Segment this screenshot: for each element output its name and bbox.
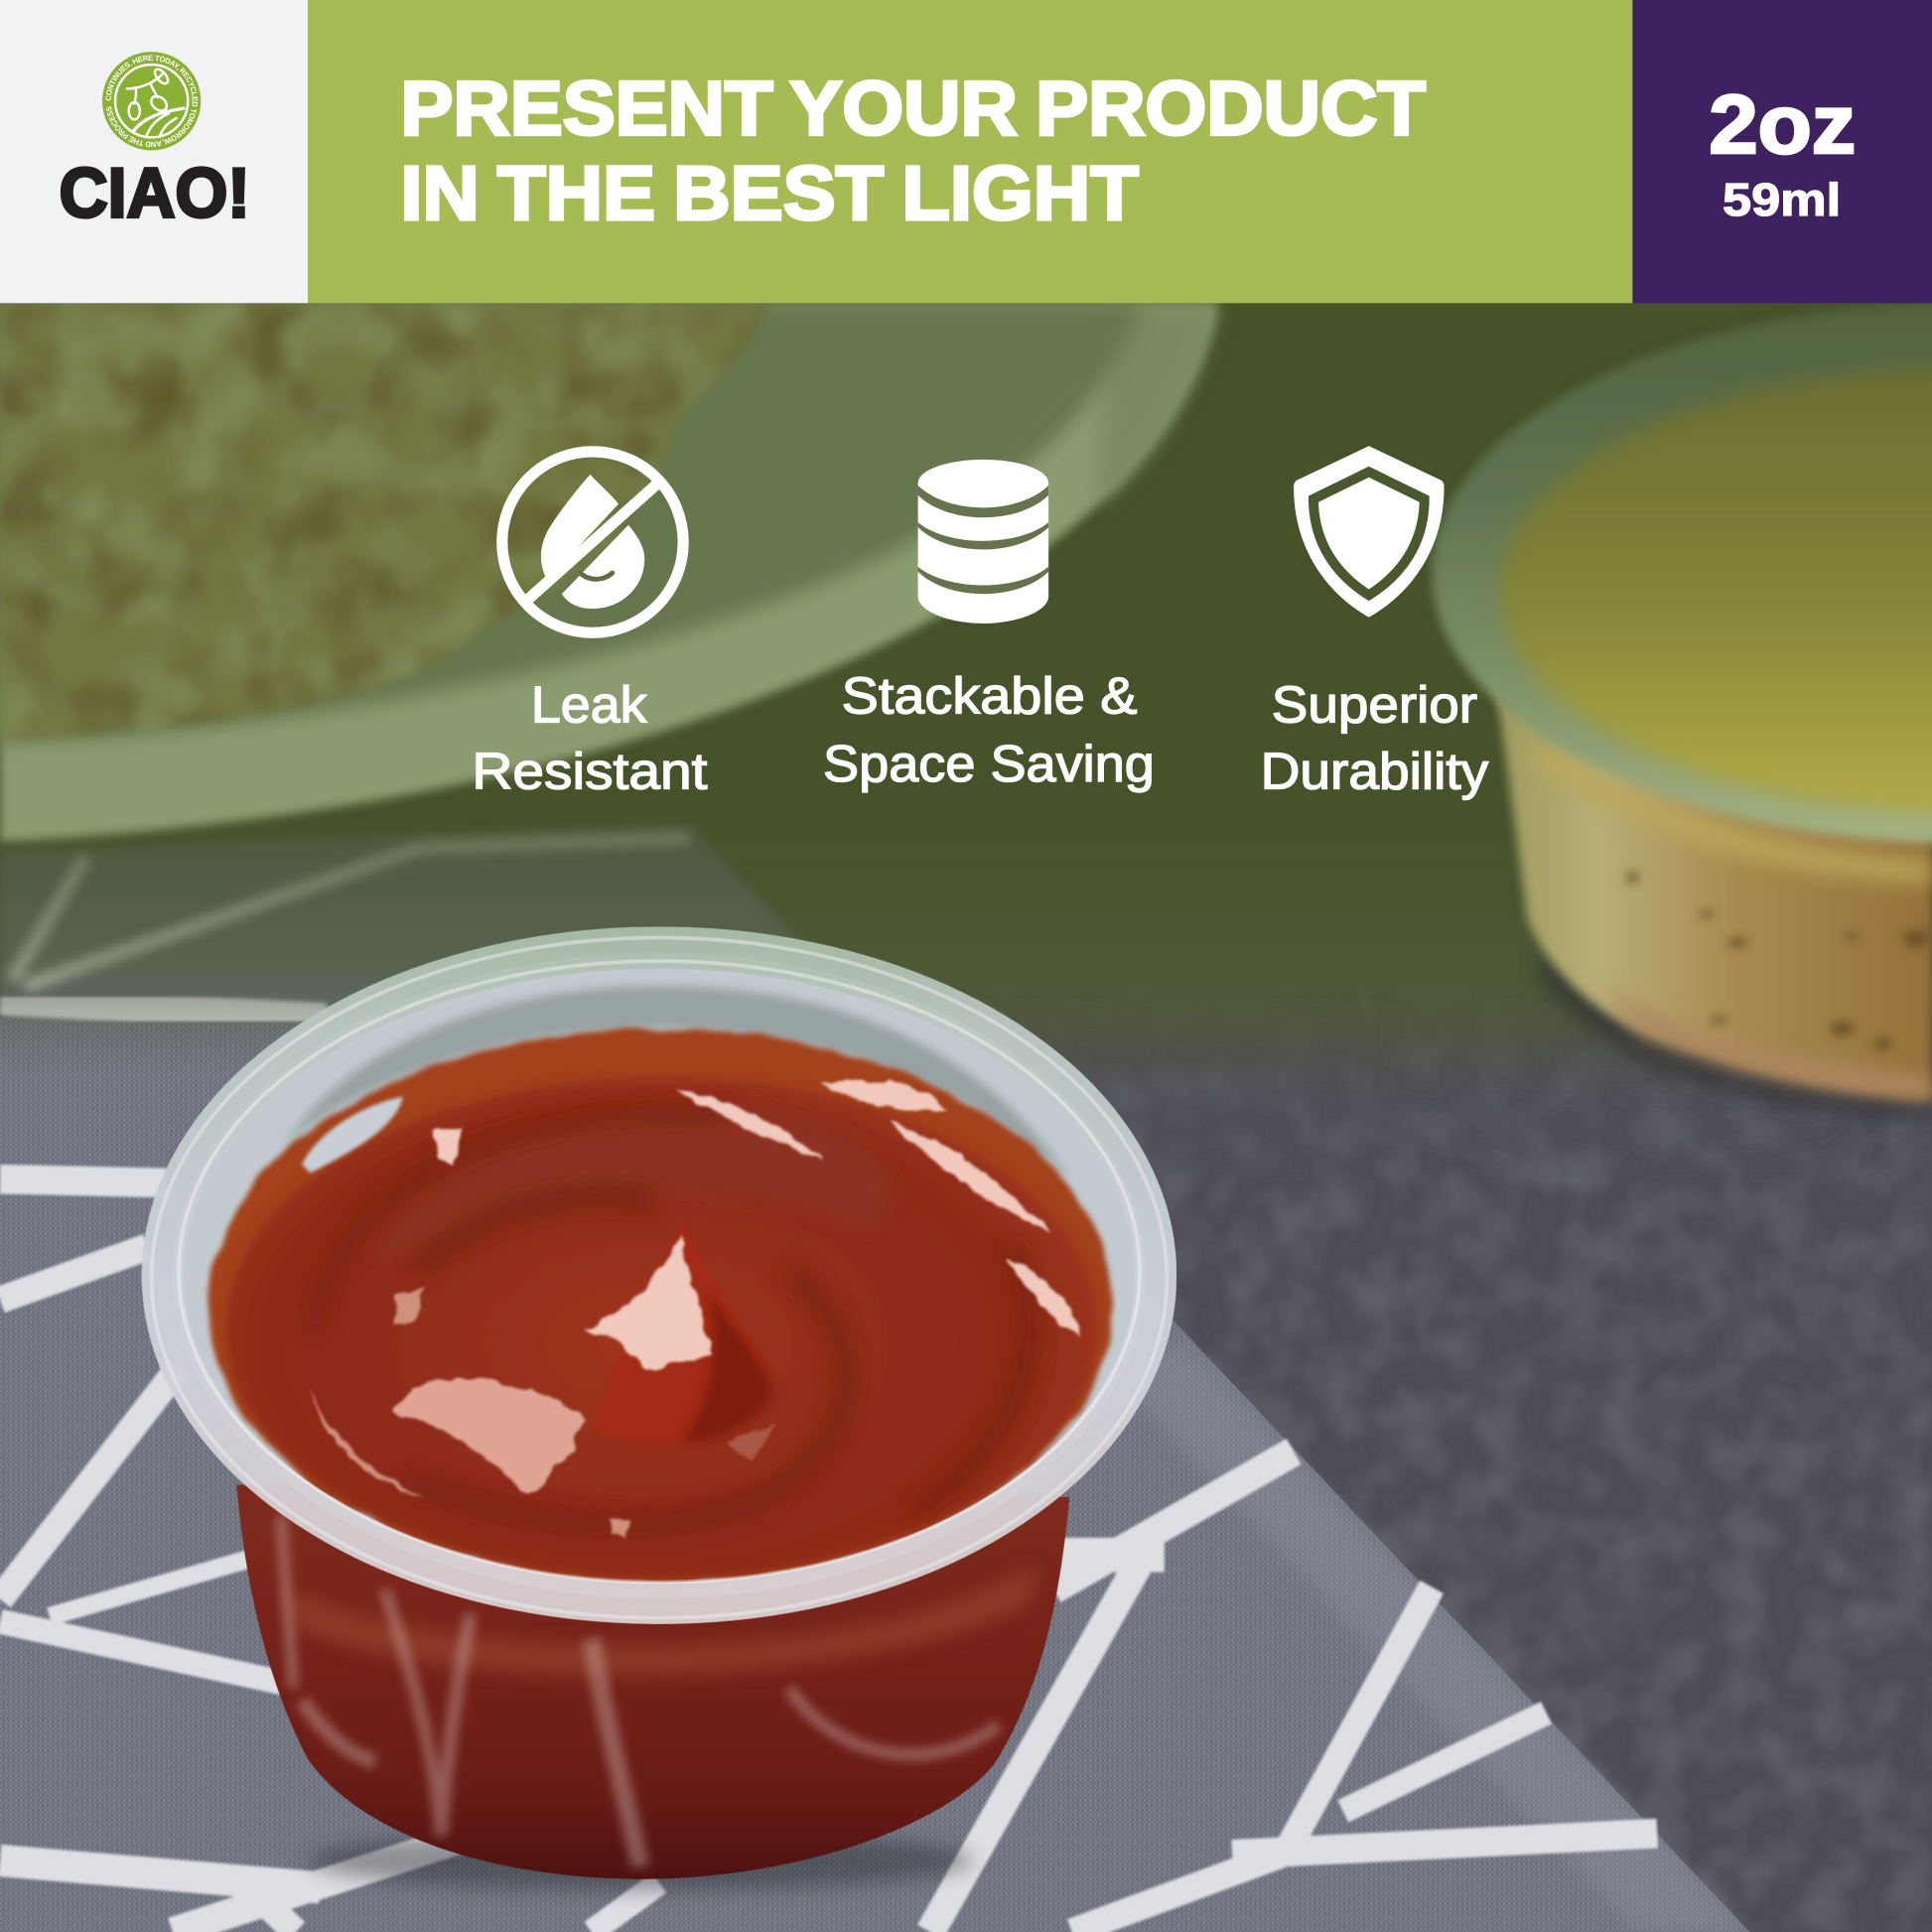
- size oz: 2oz: [1709, 78, 1856, 171]
- panel: logo: [0, 0, 308, 304]
- rim: [163, 947, 1156, 1603]
- cup body: [236, 1484, 1069, 1879]
- smear of clear plastic: [302, 1097, 403, 1173]
- label: Stackable &: [842, 668, 1138, 726]
- size ml: 59ml: [1723, 174, 1841, 225]
- rice: [0, 303, 770, 740]
- ketchup edge: [207, 1029, 1111, 1584]
- napkin upper blurred part: [0, 823, 905, 1047]
- inner wall shading: [283, 986, 1072, 1182]
- icon: no-leak drop: [502, 452, 683, 632]
- feature: durability: [1261, 446, 1488, 800]
- badge ring text: CONTINUES. HERE TODAY, RECYCLED TOMORROW, AND THE PROCESS: [105, 56, 198, 147]
- rim edge line: [152, 937, 1167, 1618]
- cup body: [1493, 665, 1932, 1099]
- glossy highlights: [311, 1079, 1082, 1538]
- logo badge: [102, 52, 201, 151]
- table mottling: [0, 986, 1932, 1932]
- label: Resistant: [472, 743, 708, 800]
- swirl peak: [592, 1220, 773, 1443]
- cup shadow: [308, 1831, 973, 1890]
- icon: stacked cups: [918, 460, 1048, 623]
- orange glow below rim: [290, 1565, 1035, 1675]
- pepper specks: [1626, 871, 1928, 1049]
- glass interior: [173, 952, 1146, 1598]
- napkin: [0, 838, 1749, 1932]
- panel: size: [1632, 0, 1932, 303]
- lip: [1432, 302, 1932, 844]
- sauce surface: [1498, 367, 1932, 813]
- label: Durability: [1261, 743, 1488, 800]
- label: [1261, 676, 1488, 800]
- yellow band under lip: [1540, 752, 1932, 873]
- logo wordmark: CIAO!: [60, 153, 250, 231]
- title: IN THE BEST LIGHT: [400, 151, 1139, 236]
- header band: [0, 0, 1932, 304]
- panel: headline: [308, 0, 1632, 303]
- icon: shield: [1294, 446, 1445, 618]
- yellow sauce cup: [1432, 302, 1932, 1119]
- plate rim: [0, 303, 1217, 842]
- ketchup cup: [152, 937, 1167, 1890]
- lighter top-centre swirl: [369, 1107, 893, 1257]
- feature: leak resistant: [472, 452, 708, 800]
- label: [472, 676, 708, 800]
- ketchup surface: [225, 1077, 1098, 1580]
- label: Space Saving: [823, 736, 1155, 793]
- plate interior: [0, 303, 1140, 742]
- title: PRESENT YOUR PRODUCT: [400, 66, 1426, 151]
- swirl shading: [314, 1113, 1030, 1523]
- rim inner line: [179, 961, 1140, 1583]
- peak shaded side: [684, 1294, 773, 1442]
- green fade overlay: [0, 813, 1932, 1072]
- plate upper rim fade: [1097, 303, 1217, 505]
- cup shadow: [1528, 961, 1932, 1119]
- label: Superior: [1272, 676, 1477, 734]
- feature: stackable: [823, 460, 1155, 793]
- label: Leak: [531, 676, 648, 734]
- plastic reflections: [281, 1516, 998, 1866]
- label: [823, 668, 1155, 793]
- badge olive branch: [127, 67, 184, 136]
- title: [400, 66, 1426, 236]
- band at base: [1601, 986, 1932, 1099]
